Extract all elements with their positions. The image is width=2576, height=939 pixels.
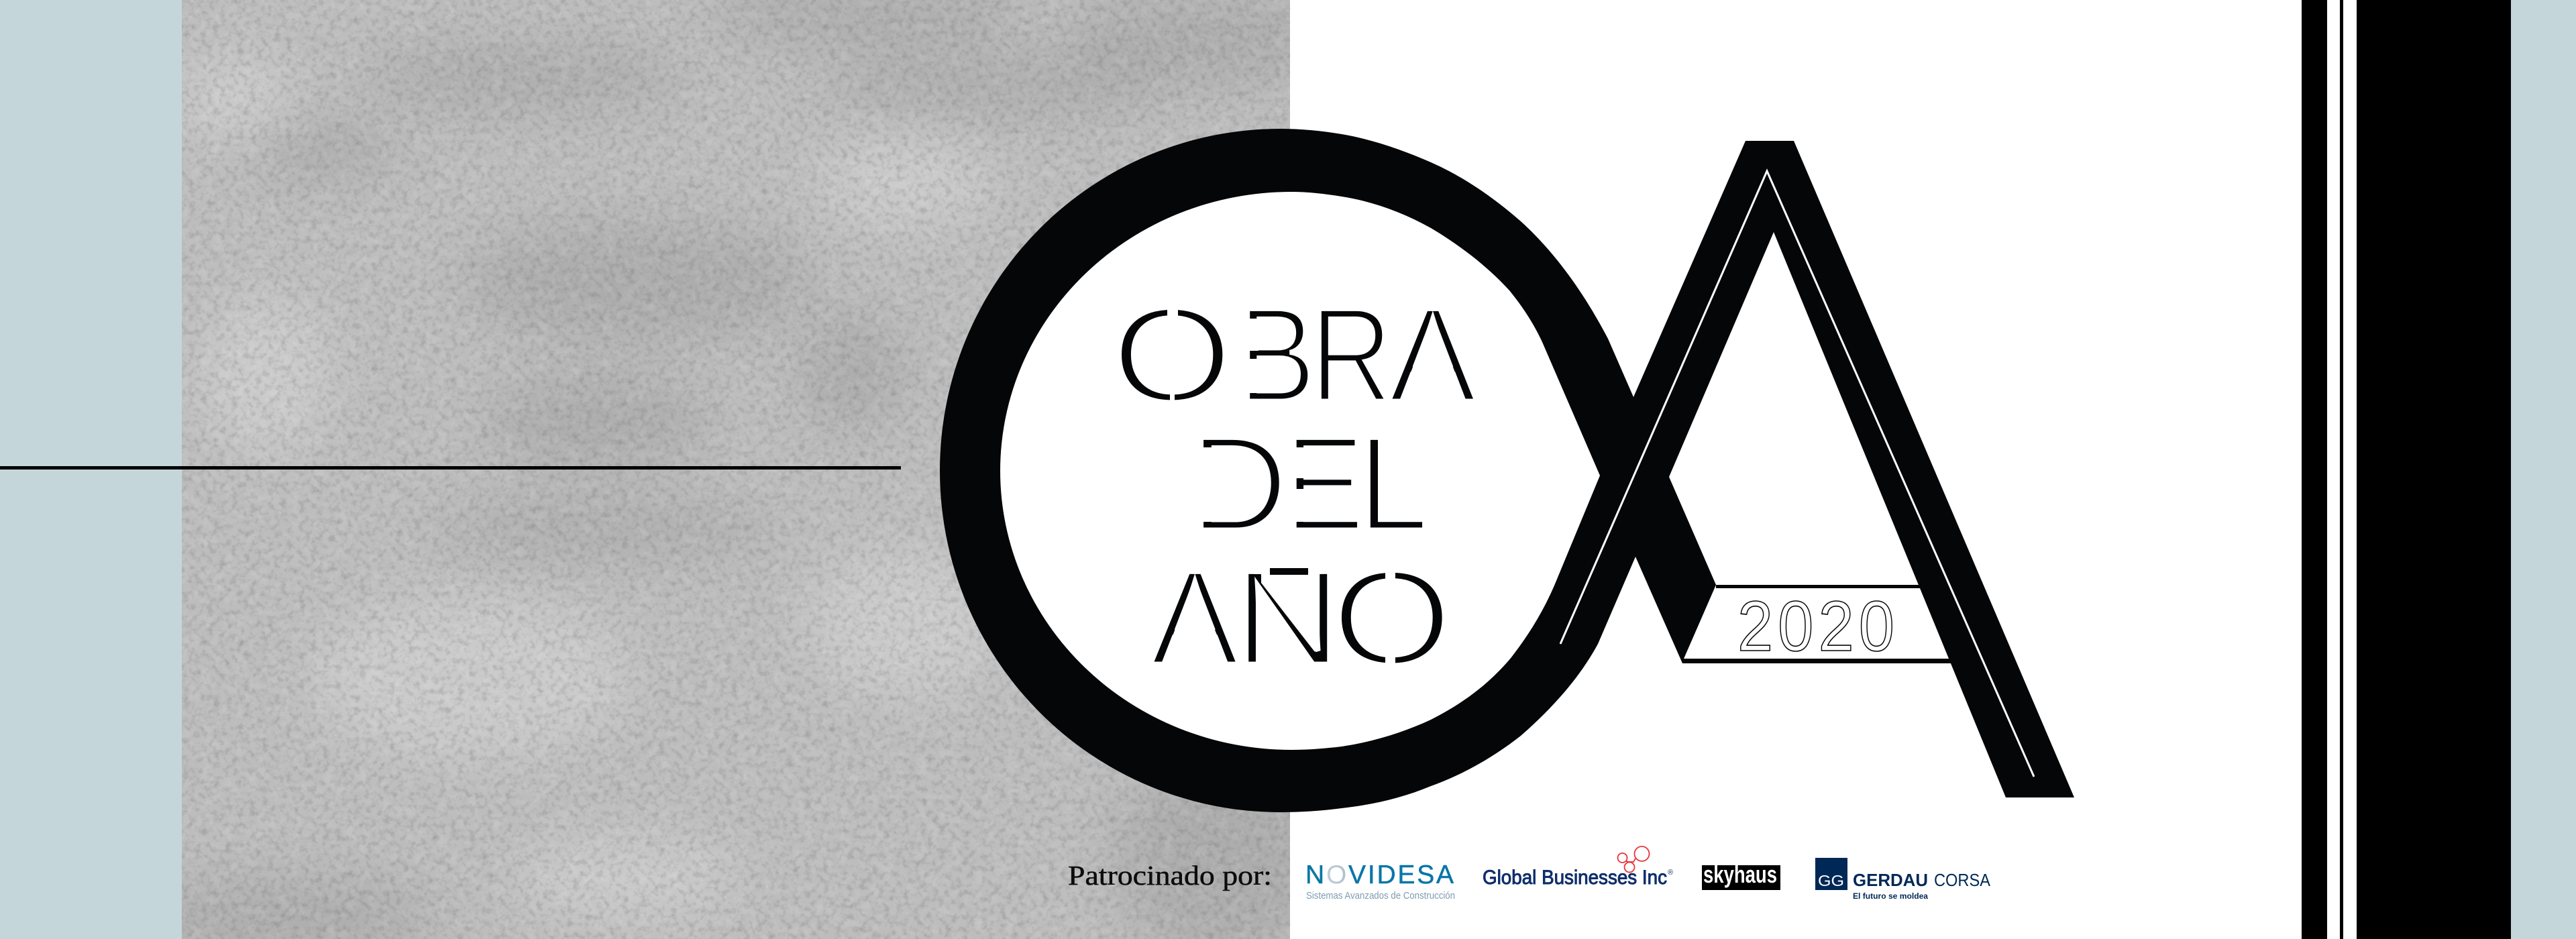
title line: OBRA [1112, 280, 1477, 430]
sponsor logo: Skyhaus: skyhaus [1703, 861, 1777, 888]
title line: DEL: E [1285, 409, 1364, 559]
OA logo mark [940, 129, 2074, 812]
year 2020: 2020 [1737, 587, 1894, 666]
sponsor logo: Novidesa: NOVIDESA [1305, 861, 1454, 889]
title line: AÑO: Ñ [1234, 543, 1342, 693]
title line: DEL: L [1358, 409, 1429, 559]
title line: DEL [1190, 409, 1429, 559]
title line: AÑO: A [1150, 543, 1239, 693]
right vertical stripes [2302, 0, 2511, 939]
sponsor logo: Gerdau Corsa [1815, 858, 1991, 901]
title line: OBRA: R [1310, 280, 1393, 430]
sponsor logo: Gerdau Corsa: CORSA [1934, 870, 1991, 890]
left pale blue band [0, 0, 182, 939]
title line: OBRA: B [1238, 280, 1316, 430]
title line: DEL: D [1190, 409, 1288, 559]
sponsor logo: Global Businesses Inc: Global Businesses Inc [1483, 867, 1667, 889]
title line: AÑO [1150, 543, 1452, 693]
sponsor logo: Gerdau Corsa: GG [1818, 872, 1844, 889]
sponsor logo: Novidesa [1305, 861, 1455, 901]
sponsor logo: Gerdau Corsa: GERDAU [1853, 870, 1928, 890]
title: OBRA DEL AÑO [1112, 280, 1477, 693]
title line: OBRA: O [1112, 280, 1232, 430]
concrete texture panel [141, 0, 1328, 939]
sponsor label: Patrocinado por: [1068, 860, 1272, 891]
sponsor logo: Gerdau Corsa: El futuro se moldea [1853, 891, 1928, 901]
horizontal rule [0, 466, 901, 470]
sponsor logo: Novidesa: Sistemas Avanzados de Construcción [1306, 890, 1455, 901]
right pale blue band [2511, 0, 2576, 939]
sponsor logo: Global Businesses Inc: ® [1668, 869, 1673, 877]
title line: OBRA: A [1389, 280, 1477, 430]
stencil cuts in the title lettering [1167, 310, 1455, 663]
title line: AÑO: O [1332, 543, 1452, 693]
sponsor logo: Global Businesses Inc [1483, 846, 1673, 889]
